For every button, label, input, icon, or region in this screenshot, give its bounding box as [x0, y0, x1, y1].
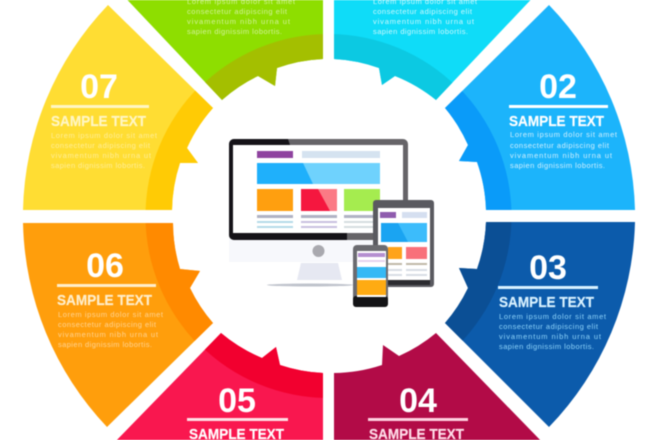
- heading: segment 07: SAMPLE TEXT: [51, 113, 146, 130]
- text block: segment 07: vivamentum nibh urna ut: [51, 151, 152, 160]
- number 06: 06: [86, 247, 124, 285]
- text block: segment 06: consectetur adipiscing elit: [58, 320, 157, 329]
- text block: segment 07: sapien dignissim lobortis.: [51, 161, 145, 170]
- panel: segment 08: [127, 0, 324, 101]
- text block: segment 01: [373, 0, 478, 36]
- text block: segment 06: vivamentum nibh urna ut: [58, 330, 159, 339]
- heading: segment 06: SAMPLE TEXT: [57, 292, 152, 309]
- number 05: 05: [218, 382, 256, 420]
- number 02: 02: [539, 68, 577, 106]
- number 03: 03: [529, 249, 567, 287]
- text block: segment 08: sapien dignissim lobortis.: [187, 27, 282, 36]
- text block: segment 07: [51, 131, 158, 170]
- icon: tablet: [373, 200, 434, 287]
- text block: segment 08: consectetur adipiscing elit: [187, 7, 288, 16]
- heading: segment 02: SAMPLE TEXT: [509, 113, 604, 130]
- text block: segment 06: sapien dignissim lobortis.: [58, 340, 152, 349]
- text block: segment 06: [58, 310, 164, 349]
- panel: segment 06: [22, 222, 214, 428]
- text block: segment 03: [499, 312, 607, 351]
- panel: segment 01: [333, 0, 531, 101]
- panel: segment 05: [116, 332, 324, 440]
- text block: segment 07: consectetur adipiscing elit: [51, 141, 151, 150]
- text block: segment 08: [187, 0, 296, 36]
- text block: segment 02: [510, 130, 618, 170]
- text block: segment 02: sapien dignissim lobortis.: [510, 161, 605, 170]
- text block: segment 03: vivamentum nibh urna ut: [499, 332, 602, 341]
- text block: segment 01: consectetur adipiscing elit: [373, 7, 473, 16]
- number 04: 04: [399, 382, 437, 420]
- number 07: 07: [80, 68, 118, 106]
- icon: desktop monitor: [229, 139, 408, 286]
- panel: segment 03: [444, 221, 636, 428]
- icon: smartphone: [353, 245, 388, 307]
- text block: segment 08: vivamentum nibh urna ut: [187, 17, 291, 26]
- text block: segment 02: vivamentum nibh urna ut: [510, 151, 613, 160]
- panel: segment 02: [444, 4, 636, 211]
- text block: segment 01: vivamentum nibh urna ut: [373, 17, 475, 26]
- heading: segment 03: SAMPLE TEXT: [499, 294, 594, 311]
- text block: segment 03: consectetur adipiscing elit: [499, 322, 599, 331]
- text block: segment 01: sapien dignissim lobortis.: [373, 27, 468, 36]
- text block: segment 02: Lorem ipsum dolor sit amet: [510, 130, 618, 139]
- text block: segment 07: Lorem ipsum dolor sit amet: [51, 131, 158, 140]
- text block: segment 03: Lorem ipsum dolor sit amet: [499, 312, 607, 321]
- panel: segment 07: [22, 4, 214, 211]
- panel: segment 04: [334, 333, 545, 440]
- text block: segment 03: sapien dignissim lobortis.: [499, 342, 594, 351]
- text block: segment 02: consectetur adipiscing elit: [510, 141, 610, 150]
- text block: segment 06: Lorem ipsum dolor sit amet: [58, 310, 164, 319]
